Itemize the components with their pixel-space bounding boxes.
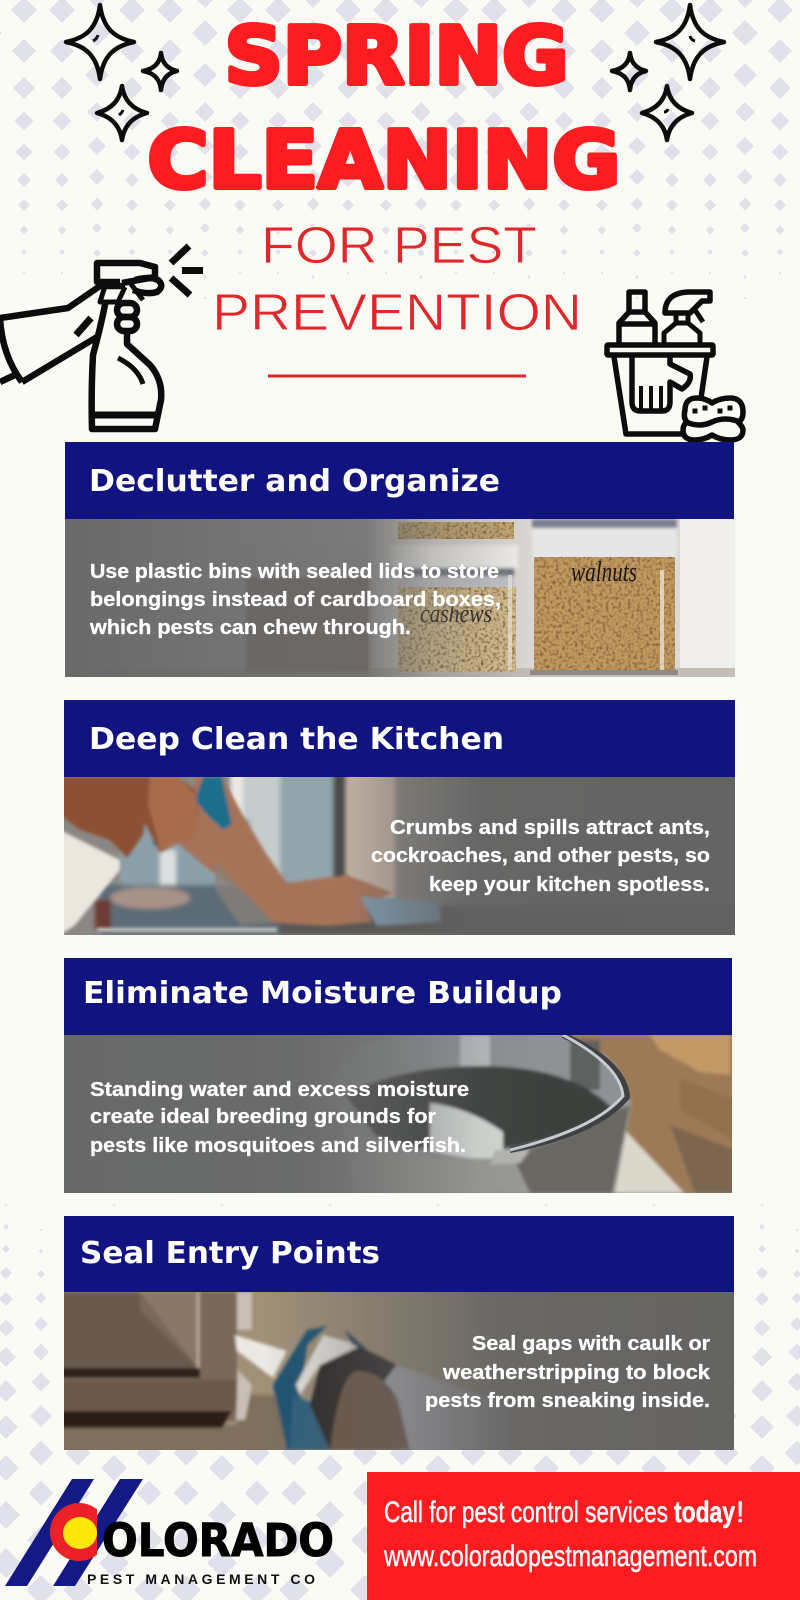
- subtitle: PREVENTION: [212, 284, 582, 342]
- logo: Colorado Pest Management Co: [5, 1479, 334, 1587]
- body text: [425, 1332, 711, 1412]
- heading: Declutter and Organize: [89, 464, 500, 499]
- call to action text: today: [674, 1496, 735, 1529]
- icon: cleaning bucket with sponge: [607, 292, 743, 440]
- icon: hand with spray bottle: [0, 246, 203, 429]
- body text: Seal gaps with caulk or: [472, 1332, 710, 1355]
- body text: which pests can chew through.: [89, 616, 411, 639]
- body text: Crumbs and spills attract ants,: [390, 816, 710, 839]
- body text: cockroaches, and other pests, so: [371, 844, 710, 867]
- body text: [89, 560, 501, 639]
- header bar: [65, 442, 734, 519]
- call to action text: Call for pest control services: [384, 1496, 668, 1529]
- body text: [90, 1078, 469, 1157]
- header bar: [64, 1216, 734, 1292]
- photo: hand wiping counter: [60, 770, 740, 935]
- call to action text: !: [736, 1496, 744, 1529]
- icon: sparkles left: [66, 5, 177, 140]
- subtitle rule: [268, 374, 526, 378]
- body text: Standing water and excess moisture: [90, 1078, 469, 1101]
- header bar: [64, 700, 735, 777]
- subtitle: [212, 217, 582, 342]
- title: SPRING: [224, 10, 568, 102]
- body text: weatherstripping to block: [442, 1361, 711, 1384]
- panel: deep clean the kitchen: [60, 700, 740, 935]
- body text: [371, 816, 710, 896]
- logo wordmark: OLORADO: [102, 1514, 334, 1567]
- icon: sparkles right: [612, 5, 724, 140]
- jar labels: cashews: [420, 599, 492, 628]
- photo: storage jars: [65, 519, 735, 677]
- heading: Eliminate Moisture Buildup: [83, 976, 562, 1011]
- panel: eliminate moisture buildup: [64, 958, 735, 1193]
- title: [148, 10, 620, 206]
- subtitle: FOR PEST: [261, 217, 537, 275]
- body text: pests from sneaking inside.: [425, 1389, 710, 1412]
- heading: Deep Clean the Kitchen: [89, 722, 504, 757]
- call to action box: [367, 1472, 800, 1600]
- body text: pests like mosquitoes and silverfish.: [90, 1134, 466, 1157]
- body text: belongings instead of cardboard boxes,: [90, 588, 501, 611]
- logo C emblem: [50, 1503, 97, 1561]
- logo tagline: PEST MANAGEMENT CO: [87, 1571, 315, 1587]
- header bar: [64, 958, 732, 1035]
- photo: storage jars: walnuts: [571, 557, 637, 588]
- photo: caulking a door frame: [60, 1292, 734, 1455]
- logo stripes: [5, 1479, 143, 1586]
- body text: Use plastic bins with sealed lids to store: [90, 560, 499, 583]
- heading: Seal Entry Points: [80, 1236, 380, 1271]
- panel: declutter and organize: [65, 442, 735, 677]
- body text: create ideal breeding grounds for: [90, 1105, 436, 1128]
- photo: metal bucket of water: [64, 1035, 735, 1193]
- panel: seal entry points: [60, 1216, 734, 1455]
- title: CLEANING: [148, 114, 620, 206]
- body text: keep your kitchen spotless.: [429, 873, 710, 896]
